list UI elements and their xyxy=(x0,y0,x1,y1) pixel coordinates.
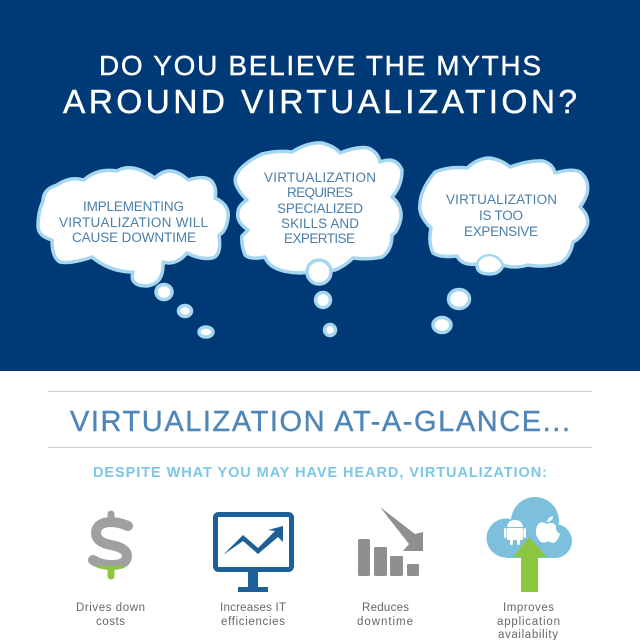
icon: cloud apps with upward arrow xyxy=(486,497,572,592)
label: increases IT efficiencies: Increases IT xyxy=(220,602,286,614)
thought bubble: expense myth: VIRTUALIZATION xyxy=(446,192,557,207)
label: increases IT efficiencies: efficiencies xyxy=(221,616,285,628)
thought bubble: downtime myth: CAUSE DOWNTIME xyxy=(72,230,196,245)
title xyxy=(63,50,577,121)
icon: dollar sign xyxy=(93,514,128,576)
thought bubble: skills myth: REQUIRES xyxy=(287,185,353,200)
thought bubble: skills myth: SPECIALIZED xyxy=(277,201,363,216)
title: DO YOU BELIEVE THE MYTHS xyxy=(99,50,541,81)
thought bubble: expense myth: IS TOO xyxy=(479,208,523,223)
label: drives down costs: costs xyxy=(96,616,125,628)
title: AROUND VIRTUALIZATION? xyxy=(63,84,577,121)
label: drives down costs xyxy=(76,602,145,628)
label: improves application availability: Improves xyxy=(503,602,554,614)
icon: falling bars with arrow xyxy=(358,507,423,576)
label: reduces downtime: downtime xyxy=(357,616,413,628)
thought bubble: downtime myth: IMPLEMENTING xyxy=(83,199,184,214)
heading: at-a-glance: VIRTUALIZATION AT-A-GLANCE... xyxy=(70,406,570,438)
label: improves application availability xyxy=(497,602,560,640)
label: increases IT efficiencies xyxy=(220,602,286,628)
label: improves application availability: application xyxy=(497,616,560,628)
thought bubble: downtime myth xyxy=(38,168,228,337)
label: drives down costs: Drives down xyxy=(76,602,145,614)
subheading: DESPITE WHAT YOU MAY HAVE HEARD, VIRTUALIZATION: xyxy=(93,465,547,481)
label: reduces downtime: Reduces xyxy=(362,602,409,614)
thought bubble: downtime myth: VIRTUALIZATION WILL xyxy=(59,215,208,230)
label: reduces downtime xyxy=(357,602,413,628)
thought bubble: skills myth: SKILLS AND xyxy=(281,216,359,231)
icon: monitor with rising chart xyxy=(216,514,292,592)
panel: navy myths background xyxy=(0,0,640,371)
thought bubble: expense myth: EXPENSIVE xyxy=(464,224,538,239)
thought bubble: expense myth xyxy=(420,158,588,332)
thought bubble: skills myth xyxy=(235,143,402,336)
thought bubble: skills myth: VIRTUALIZATION xyxy=(264,170,376,185)
thought bubble: skills myth: EXPERTISE xyxy=(284,231,355,246)
